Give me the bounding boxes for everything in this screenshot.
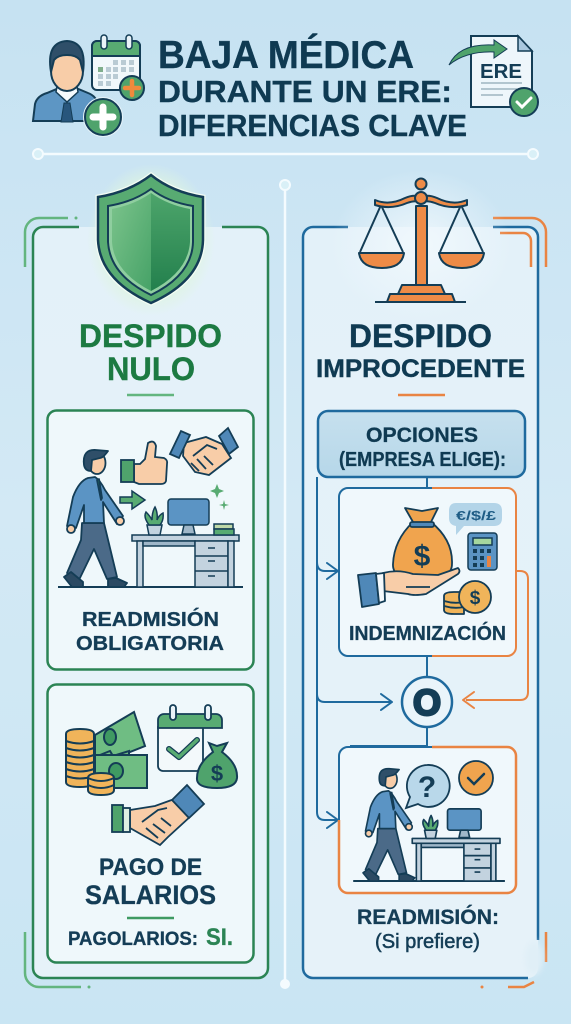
label: pagolarios si bbox=[68, 924, 233, 951]
icon: handshake bbox=[170, 428, 238, 475]
header icon: ERE document bbox=[449, 36, 538, 116]
label: pago de salarios: PAGO DE bbox=[99, 854, 202, 881]
box: opciones bbox=[318, 411, 525, 477]
icon: question bubble bbox=[406, 765, 450, 808]
label: pagolarios si: SI. bbox=[206, 924, 233, 951]
icon: question bubble: ? bbox=[418, 771, 436, 804]
label: readmision si prefiere: READMISIÓN: bbox=[357, 905, 499, 929]
label: indemnizacion: INDEMNIZACIÓN bbox=[349, 621, 506, 645]
title: BAJA MÉDICA bbox=[158, 33, 414, 77]
icon: calculator bbox=[468, 533, 497, 570]
illustration: office desk with monitor bbox=[58, 499, 243, 587]
heading: despido improcedente bbox=[316, 318, 525, 383]
card: indemnizacion: $ bbox=[414, 540, 431, 573]
icon: handshake with cuffs bbox=[112, 785, 204, 845]
icon: money bag: $ bbox=[211, 761, 223, 786]
label: readmision si prefiere bbox=[357, 905, 499, 953]
icon: banknotes and coins bbox=[66, 712, 147, 795]
header divider line bbox=[33, 149, 538, 159]
node: letter O choice: O bbox=[413, 682, 441, 723]
label: pago de salarios: SALARIOS bbox=[85, 880, 216, 910]
title: DURANTE UN ERE: bbox=[158, 74, 452, 109]
label: pago de salarios bbox=[85, 854, 216, 910]
card: indemnizacion bbox=[339, 488, 516, 656]
icon: currency speech bubble: €/$/£ bbox=[456, 508, 497, 523]
card: readmision opcional bbox=[339, 747, 516, 893]
box: opciones: OPCIONES bbox=[366, 424, 478, 447]
heading: despido nulo: DESPIDO bbox=[79, 318, 222, 354]
box: opciones: (EMPRESA ELIGE): bbox=[339, 449, 506, 471]
icon: thumbs up bbox=[121, 442, 167, 484]
label: pagolarios si: PAGOLARIOS: bbox=[68, 929, 198, 950]
illustration: person at desk bbox=[353, 769, 505, 881]
card: indemnizacion: $ bbox=[470, 588, 481, 609]
heading: despido nulo bbox=[79, 318, 222, 387]
label: readmision obligatoria: OBLIGATORIA bbox=[76, 633, 224, 655]
label: readmision obligatoria: READMISIÓN bbox=[82, 607, 219, 631]
icon: sparkles bbox=[210, 484, 229, 510]
icon: money bag bbox=[197, 743, 237, 788]
panel: despido improcedente bbox=[303, 170, 546, 988]
icon: calendar with check bbox=[158, 705, 222, 771]
icon: currency speech bubble bbox=[449, 503, 502, 535]
panel: despido nulo bbox=[25, 164, 268, 988]
icon: orange check badge bbox=[459, 761, 493, 795]
icon: orange scales of justice bbox=[359, 178, 484, 302]
header icon: employee with calendar and medical crosses bbox=[33, 35, 144, 136]
title bbox=[158, 33, 467, 143]
header icon: ERE document: ERE bbox=[480, 61, 522, 83]
title: DIFERENCIAS CLAVE bbox=[158, 108, 467, 143]
heading: despido improcedente: DESPIDO bbox=[349, 318, 492, 354]
heading: despido nulo: NULO bbox=[107, 351, 195, 387]
icon: green arrow bbox=[120, 491, 145, 509]
icon: money bag on hand bbox=[358, 508, 491, 614]
card: pago de salarios bbox=[48, 684, 254, 962]
heading: despido improcedente: IMPROCEDENTE bbox=[316, 355, 525, 383]
label: readmision si prefiere: (Si prefiere) bbox=[375, 931, 480, 953]
icon: green shield bbox=[98, 175, 203, 303]
card: readmision obligatoria bbox=[48, 410, 254, 670]
central vertical divider bbox=[280, 180, 290, 989]
flow connectors bbox=[317, 477, 528, 828]
label: readmision obligatoria bbox=[76, 607, 224, 655]
node: letter O choice bbox=[402, 677, 452, 727]
illustration: person walking bbox=[64, 450, 127, 587]
